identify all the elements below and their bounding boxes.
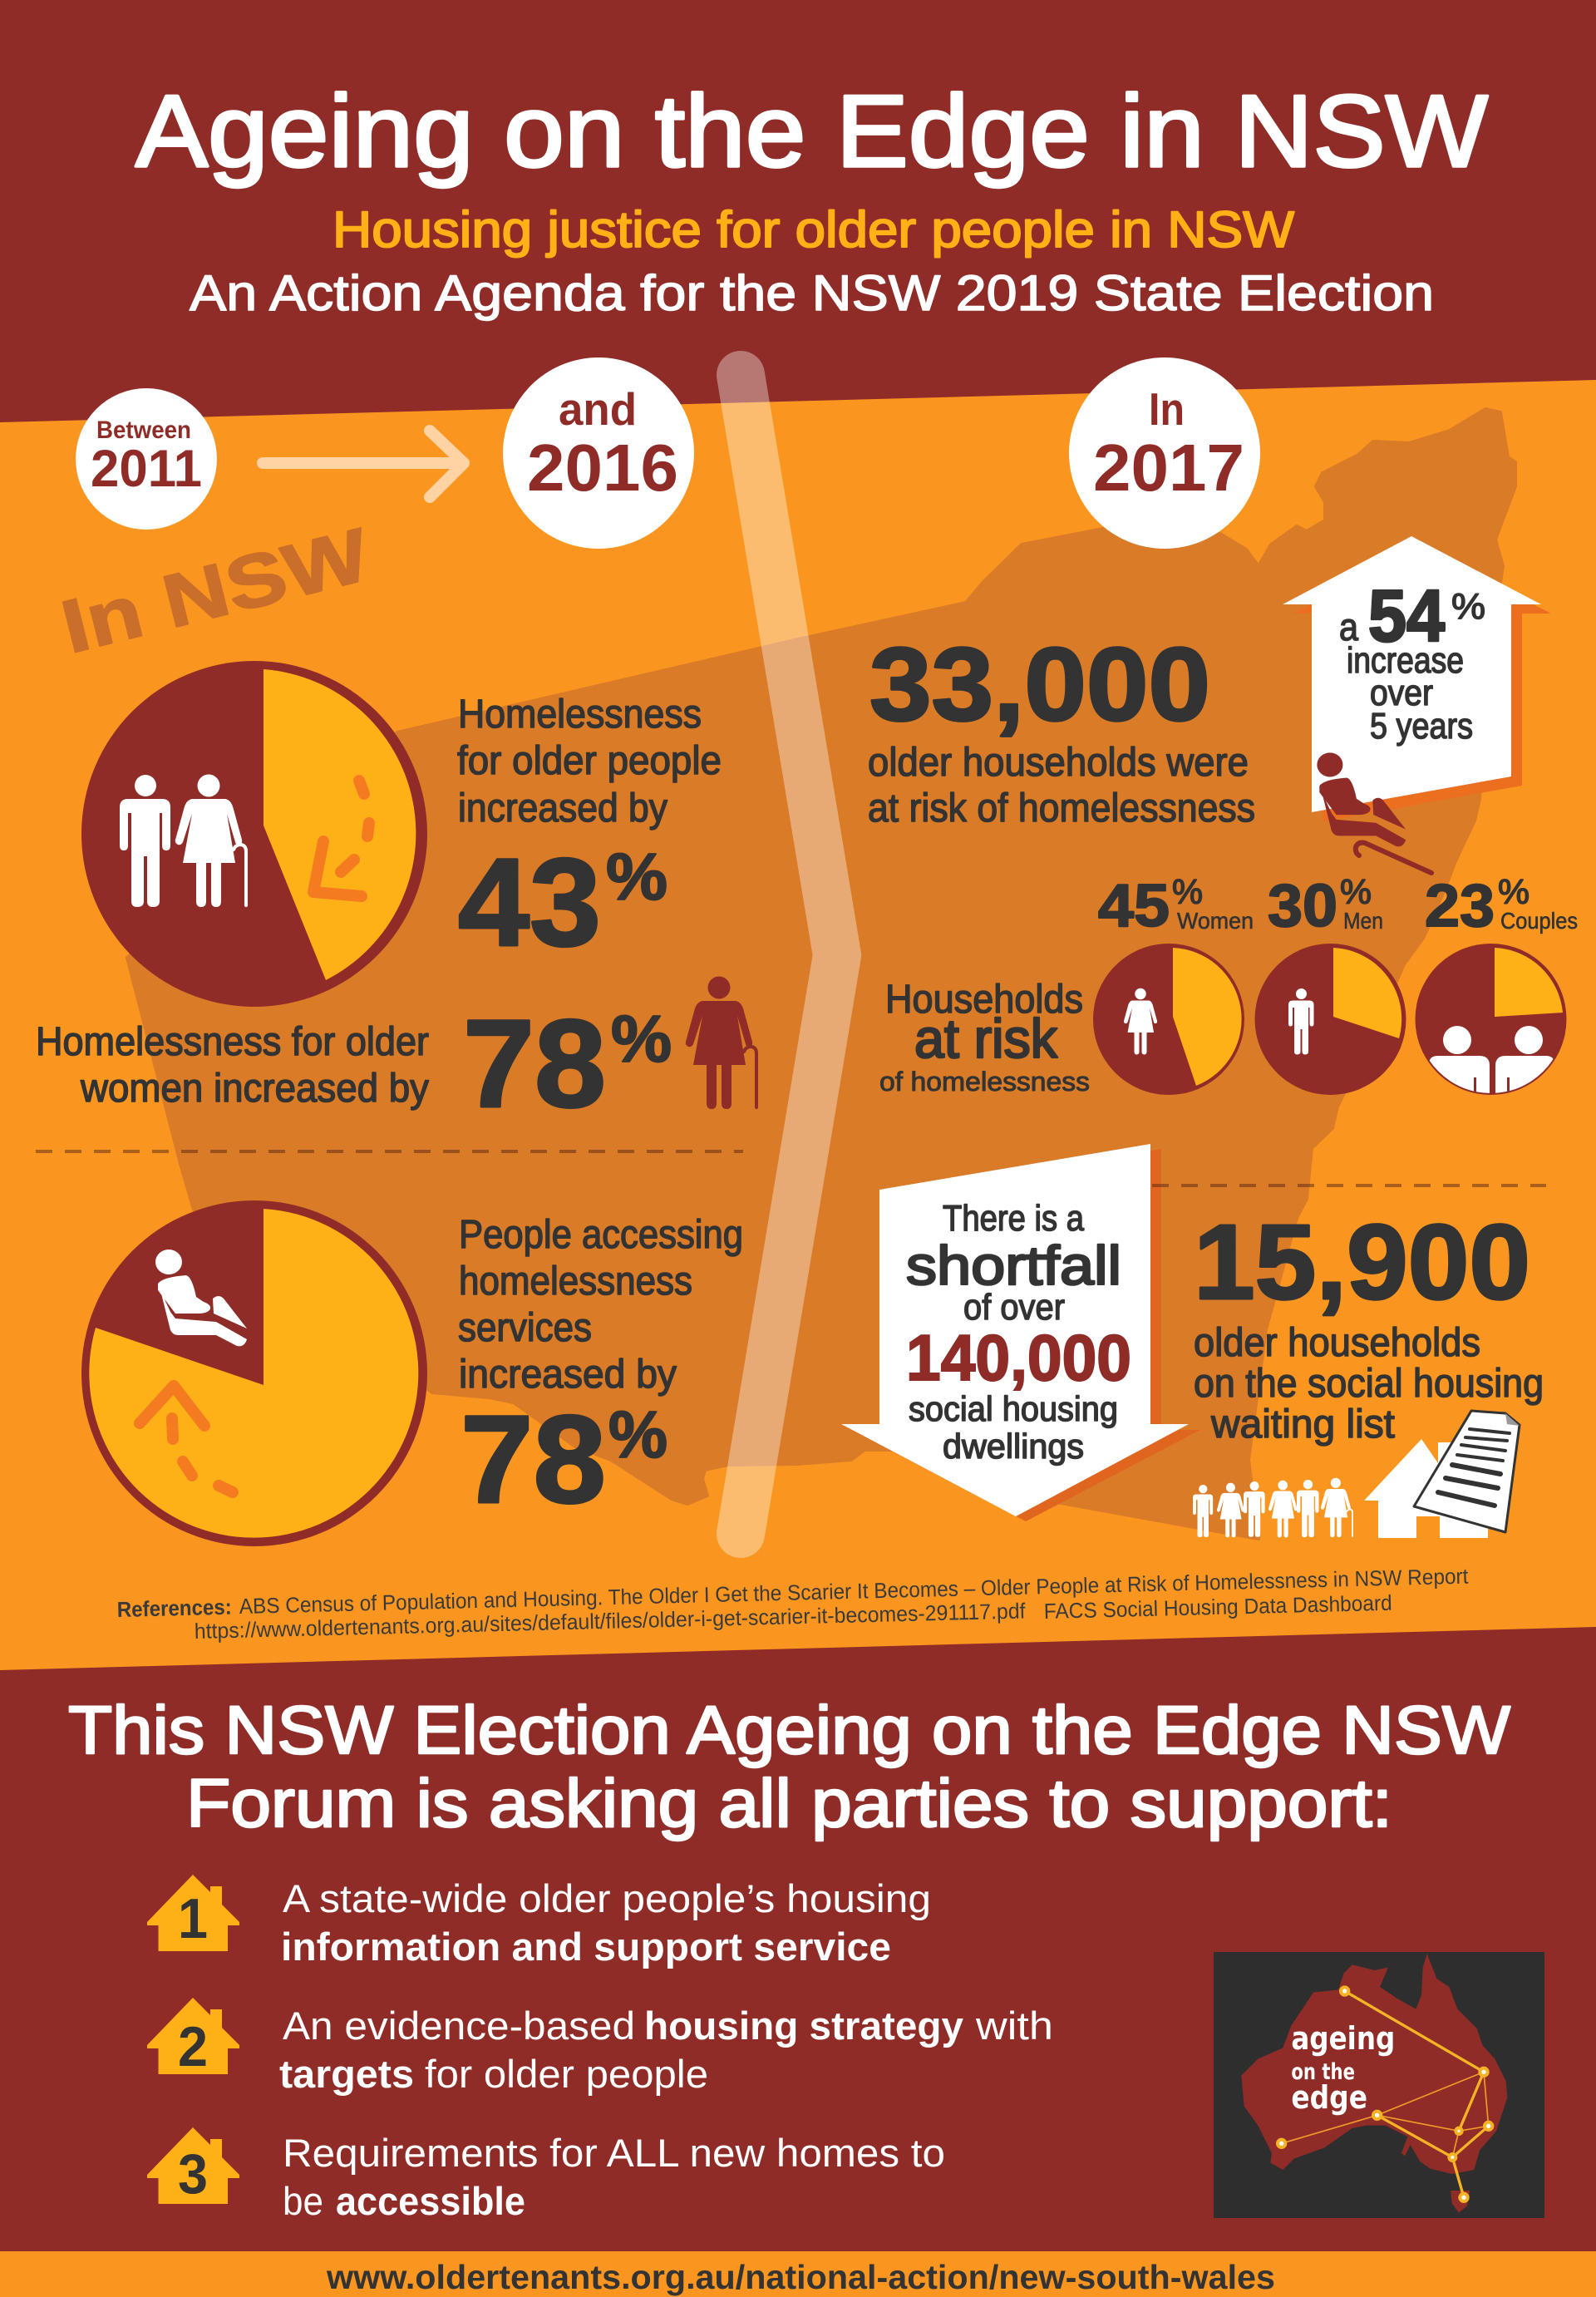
timeline circle: and 2016: 2016 [527,431,678,505]
icon: house [1364,1439,1488,1538]
text: at risk of homelessness [868,741,1255,831]
label: households at risk: at risk [914,1008,1058,1069]
stat: 78% services: 78 [461,1389,606,1529]
stat: 43%: % [606,840,667,914]
timeline circle: between 2011: 2011 [91,440,202,498]
icon: older woman [686,976,756,1109]
timeline circle: in 2017: In [1149,383,1185,435]
logo wordmark: on the [1291,2059,1355,2085]
stat: 23% couples [1425,872,1578,939]
logo network lines [1282,1991,1489,2197]
heading: forum ask: This NSW Election Ageing on the Edge NSW [68,1693,1511,1768]
up house arrow: 54% increase: increase [1347,640,1464,681]
stat: 43%: 43 [458,832,601,972]
icon: seated person with cane [1317,752,1431,873]
timeline circle: and 2016 [503,357,694,549]
text: waiting list: waiting list [1210,1402,1395,1447]
timeline circle: and 2016: and [559,383,637,435]
item 3: accessible [336,2179,525,2223]
references: References: [116,1595,232,1622]
text: waiting list: on the social housing [1194,1362,1544,1406]
subtitle: Housing justice for older people in NSW [332,201,1294,258]
icon: seated person [155,1250,247,1346]
chevron divider [741,375,837,1534]
text: people accessing services: homelessness [459,1259,692,1304]
item 3 [147,2127,945,2223]
down arrow: shortfall: of over [963,1287,1065,1328]
text: waiting list: older households [1194,1321,1480,1365]
icon: queue of people [1193,1478,1352,1537]
up house arrow: 54% increase: 54 [1368,574,1445,657]
timeline circle: in 2017 [1069,357,1260,549]
text: older women: women increased by [80,1067,429,1111]
stat: 78% women: 78 [463,993,606,1133]
lower panel band [0,1627,1596,2297]
stat: 78% women [463,993,672,1133]
icon: woman [1124,988,1157,1054]
logo wordmark: edge [1291,2079,1367,2117]
up house arrow: 54% increase: 5 years [1370,706,1473,747]
label: households at risk: of homelessness [879,1067,1090,1097]
logo wordmark [1291,2020,1395,2117]
stat: 30% men: % [1340,872,1372,911]
pie chart: women 45% [1093,944,1244,1095]
stat: 78% services [461,1389,667,1529]
references: FACS Social Housing Data Dashboard [1043,1590,1392,1624]
item 2: An evidence-based [283,2004,635,2048]
references: https://www.oldertenants.org.au/sites/default/files/older-i-get-scarier-it-becomes-291117.pdf [194,1598,1027,1644]
heading: forum ask [68,1693,1511,1841]
stat: 23% couples: % [1498,872,1530,911]
stat: 43% [458,832,667,972]
icon: couple [1429,1026,1554,1097]
label: households at risk [879,978,1090,1097]
item 1: A state-wide older people’s housing [283,1876,931,1920]
down arrow: shortfall: social housing [909,1389,1118,1428]
logo map of Australia [1241,1954,1507,2213]
stat: 78% services: % [608,1397,667,1471]
stat: 45% women: Women [1177,908,1254,934]
stat: 45% women: 45 [1098,873,1170,939]
stat: 45% women: % [1172,872,1203,911]
item 2: with [975,2004,1053,2048]
text: at risk of homelessness: older households were [868,741,1249,785]
text: people accessing services: increased by [459,1353,677,1397]
icon: house number 3: 3 [178,2142,208,2206]
timeline circle: between 2011 [76,388,217,530]
header band [0,0,1596,422]
text: homelessness for older people: Homelessness [458,693,702,737]
item 2: housing strategy [644,2004,963,2048]
stat: 33,000: 33,000 [869,627,1210,742]
icon: house number 2: 2 [178,2015,208,2078]
stat: 15,900: 15,900 [1194,1203,1530,1322]
up house arrow: 54% increase: a [1339,605,1358,648]
stat: 30% men [1268,872,1383,939]
In NSW label: In NSW [54,513,377,669]
text: homelessness for older people [457,693,722,831]
arrow: timeline [263,431,464,497]
item 2 [147,1998,1053,2096]
footer band with URL [0,2251,1596,2297]
logo wordmark: ageing [1291,2020,1395,2058]
pie chart: men 30% [1255,944,1406,1095]
heading: forum ask: Forum is asking all parties to support: [186,1766,1392,1841]
footer band with URL: www.oldertenants.org.au/national-action/new-south-wales [326,2258,1275,2296]
arrow: upward trend [140,1386,233,1492]
text: homelessness for older people: increased by [458,786,667,831]
stat: 30% men: 30 [1268,873,1337,939]
text: older women [36,1020,429,1111]
text: homelessness for older people: for older people [457,739,722,783]
background map of NSW [127,409,1515,1539]
logo network nodes [1278,1987,1492,2201]
up house arrow: 54% increase [1283,536,1551,821]
references: ABS Census of Population and Housing. The Older I Get the Scarier It Becomes – Older People at Risk of Homelessness in NSW Report [239,1564,1469,1619]
icon: older couple [120,775,246,907]
item 3: Requirements for ALL new homes to [283,2131,945,2175]
icon: house number 1 [147,1875,239,1951]
icon: house number 2 [147,1998,239,2078]
title: Ageing on the Edge in NSW [135,75,1488,189]
icon: waiting list paper [1414,1411,1520,1532]
down arrow: shortfall: dwellings [943,1427,1084,1466]
stat: 23% couples: 23 [1425,873,1495,939]
pie chart: services 78% [81,1200,427,1546]
logo: ageing on the edge [1214,1952,1544,2218]
stat: 23% couples: Couples [1500,908,1578,934]
text: people accessing services: People accessing [459,1213,743,1257]
icon: man [1288,988,1313,1054]
up house arrow: 54% increase: over [1370,673,1433,713]
item 2: for older people [425,2052,708,2096]
text: older women: Homelessness for older [36,1020,429,1064]
text: people accessing services: services [458,1306,592,1350]
down arrow: shortfall: There is a [943,1198,1084,1239]
down arrow: shortfall: 140,000 [906,1321,1131,1394]
item 3: be [283,2179,323,2223]
icon: house number 1: 1 [178,1887,208,1950]
timeline circle: between 2011: Between [96,417,191,444]
pie chart: couples 23% [1415,944,1566,1097]
down arrow: shortfall: shortfall [906,1235,1121,1296]
down arrow: shortfall [841,1144,1200,1521]
stat: 45% women [1098,872,1254,939]
references [116,1564,1469,1644]
text: waiting list [1194,1321,1544,1447]
item 1: information and support service [281,1925,891,1969]
text: people accessing services [458,1213,743,1397]
stat: 30% men: Men [1343,908,1383,934]
subheading: An Action Agenda for the NSW 2019 State Election [190,265,1434,321]
timeline circle: in 2017: 2017 [1093,431,1244,505]
icon: house number 3 [147,2127,239,2206]
arrow: downward trend [313,781,369,896]
pie chart: homelessness 43% [81,661,427,1007]
up house arrow: 54% increase: % [1451,586,1485,627]
item 2: targets [279,2052,414,2096]
text: at risk of homelessness: at risk of homelessness [868,786,1255,831]
item 1 [147,1875,931,1969]
label: households at risk: Households [885,978,1083,1022]
stat: 78% women: % [611,1002,672,1076]
